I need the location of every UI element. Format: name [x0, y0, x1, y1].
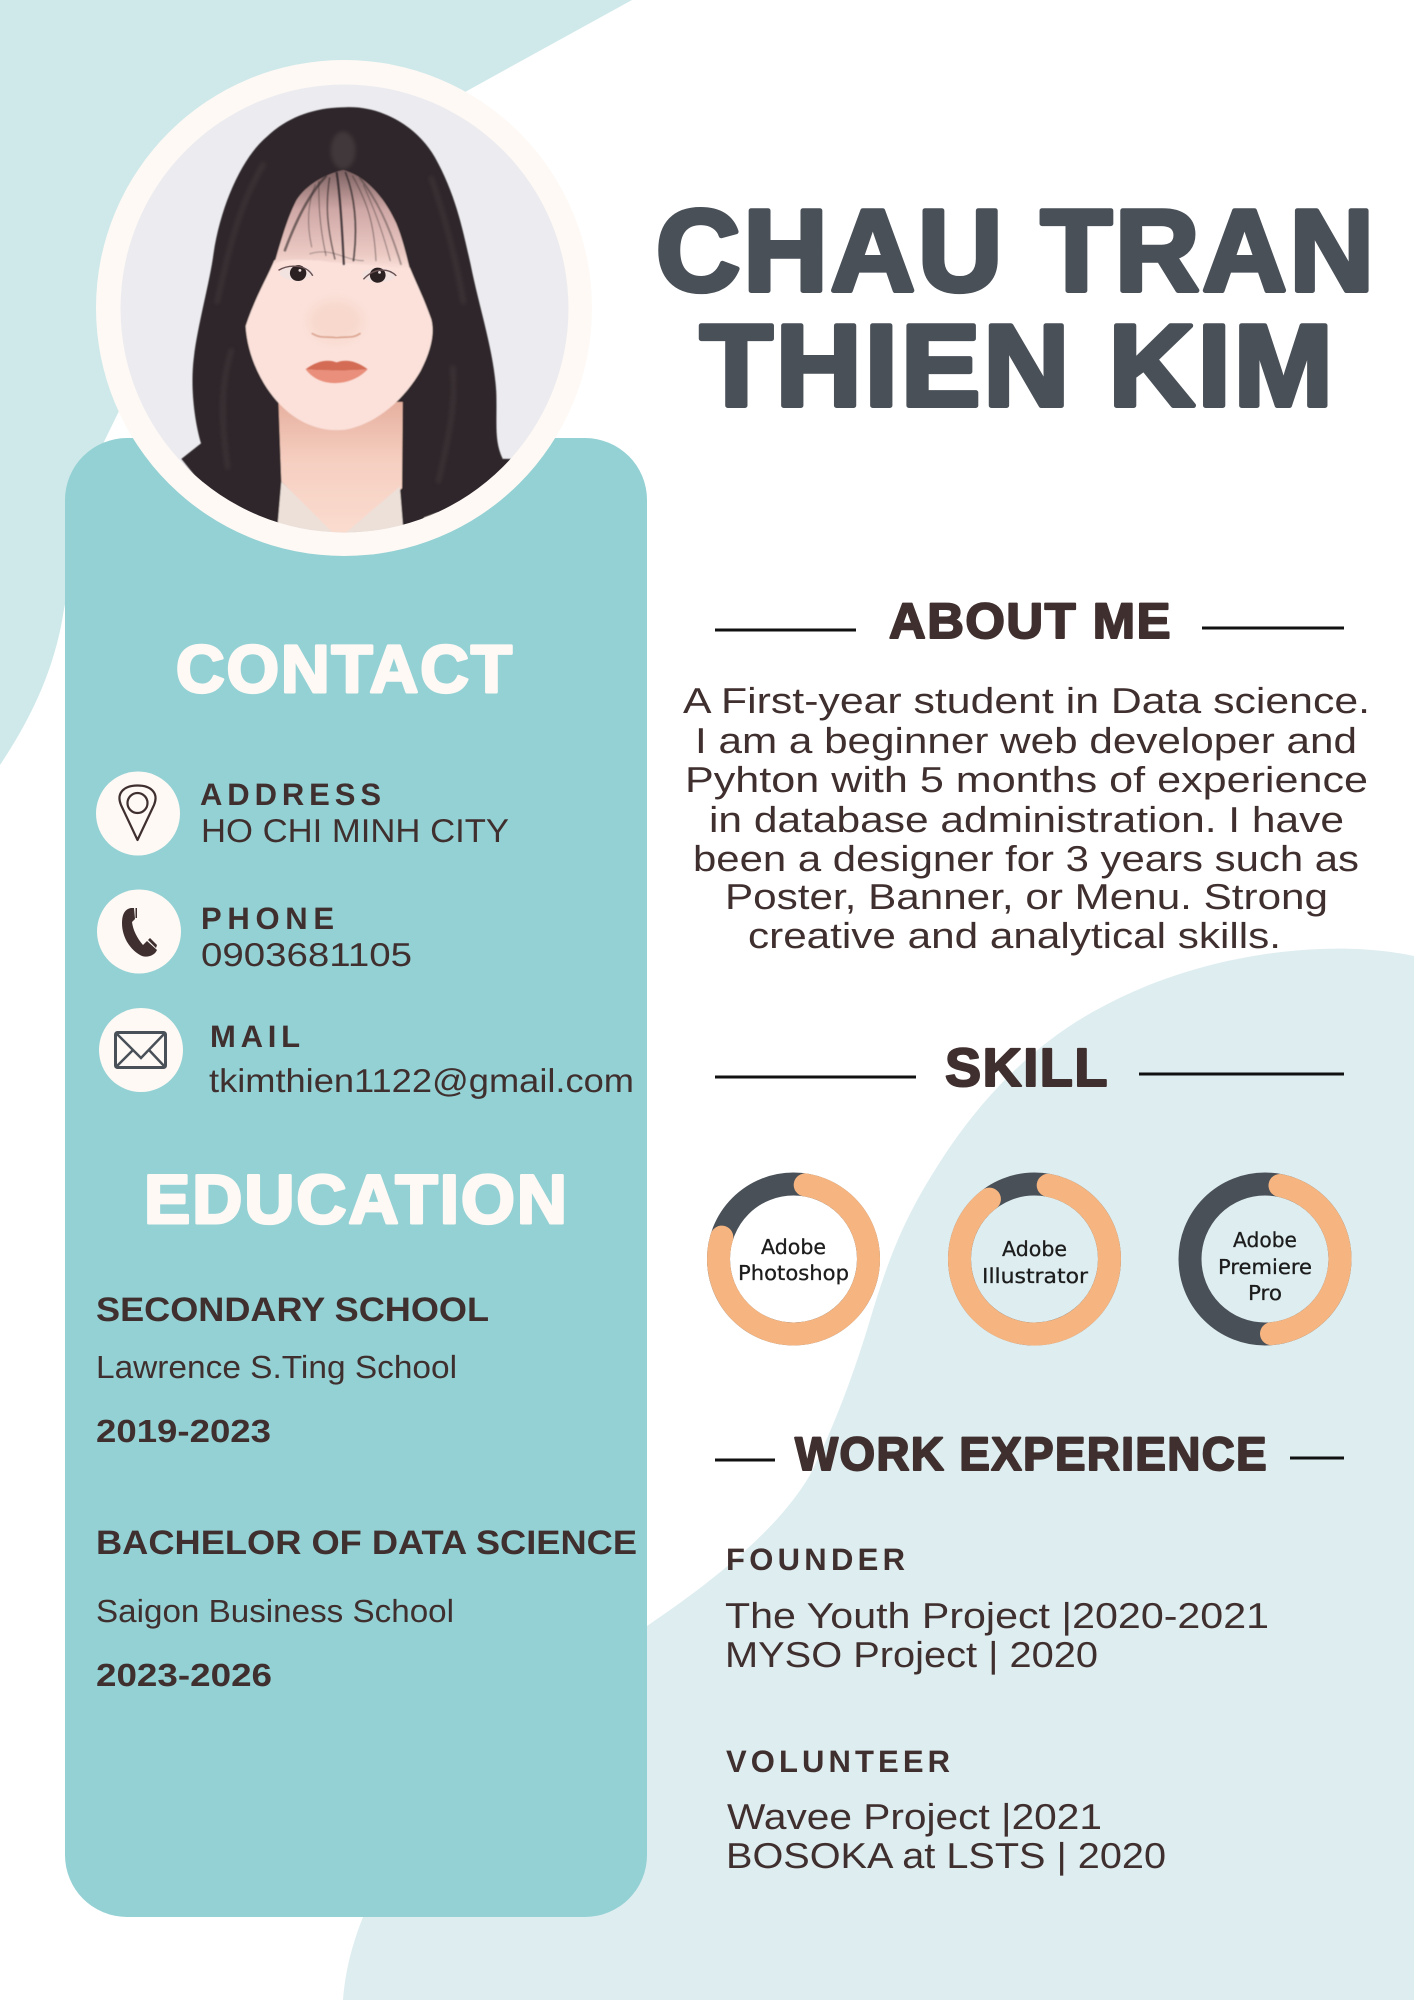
- skill ring: photoshop: [718, 1184, 869, 1334]
- icon: envelope: [99, 1008, 183, 1092]
- skill ring: illustrator: Illustrator: [982, 1264, 1089, 1288]
- heading: contact: CONTACT: [176, 632, 514, 707]
- about me text: Pyhton with 5 months of experience: [685, 759, 1368, 800]
- title: THIEN KIM: [700, 300, 1336, 430]
- icon: location pin: [96, 772, 180, 856]
- work: founder: The Youth Project |2020-2021: [725, 1595, 1269, 1636]
- education: bachelor: Saigon Business School: [96, 1593, 454, 1629]
- about me text: I am a beginner web developer and: [695, 720, 1357, 761]
- work: volunteer: BOSOKA at LSTS | 2020: [726, 1835, 1166, 1876]
- phone row: [97, 890, 412, 974]
- background shape: bottom-right: [343, 949, 1414, 2000]
- mail label: MAIL: [210, 1019, 300, 1054]
- heading: work experience: WORK EXPERIENCE: [795, 1427, 1268, 1480]
- about me text: Poster, Banner, or Menu. Strong: [725, 876, 1328, 917]
- heading: about me: ABOUT ME: [889, 593, 1172, 649]
- address row: [96, 772, 509, 856]
- panel: left sidebar: [65, 438, 647, 1917]
- education: secondary school: SECONDARY SCHOOL: [96, 1291, 489, 1329]
- about me text: [683, 680, 1370, 956]
- education: secondary school: Lawrence S.Ting School: [96, 1349, 457, 1385]
- lips: [306, 361, 368, 383]
- skill ring: premiere pro: [1190, 1184, 1340, 1334]
- mail row: [99, 1008, 634, 1099]
- portrait ring: [96, 60, 592, 556]
- skill ring: photoshop: Photoshop: [738, 1261, 849, 1285]
- heading: about me: [715, 593, 1344, 649]
- education: secondary school: [96, 1291, 489, 1449]
- heading: skill: [715, 1038, 1344, 1098]
- work: founder: MYSO Project | 2020: [725, 1634, 1098, 1675]
- heading: education: EDUCATION: [144, 1161, 569, 1238]
- title: CHAU TRAN: [656, 186, 1377, 316]
- about me text: in database administration. I have: [709, 799, 1344, 840]
- address value: HO CHI MINH CITY: [201, 812, 509, 849]
- education: bachelor: [96, 1524, 637, 1693]
- skill ring: premiere pro: Pro: [1248, 1281, 1282, 1305]
- background shape: top-left: [0, 0, 632, 765]
- work: founder: [725, 1542, 1269, 1675]
- address label: ADDRESS: [200, 777, 381, 812]
- education: bachelor: 2023-2026: [96, 1657, 272, 1693]
- work: founder: FOUNDER: [726, 1542, 905, 1577]
- skill ring: illustrator: Adobe: [1002, 1237, 1067, 1261]
- nose: [310, 302, 362, 340]
- about me text: A First-year student in Data science.: [683, 680, 1370, 721]
- heading: skill: SKILL: [945, 1038, 1109, 1098]
- work: volunteer: VOLUNTEER: [726, 1744, 950, 1779]
- skill ring: premiere pro: Premiere: [1218, 1255, 1312, 1279]
- icon: phone: [97, 890, 181, 974]
- eyes: [278, 265, 396, 283]
- phone label: PHONE: [201, 901, 334, 936]
- about me text: been a designer for 3 years such as: [693, 838, 1359, 879]
- work: volunteer: Wavee Project |2021: [727, 1796, 1102, 1837]
- work: volunteer: [726, 1744, 1166, 1876]
- title: [656, 186, 1377, 430]
- mail value: tkimthien1122@gmail.com: [209, 1062, 634, 1099]
- portrait photo: [110, 75, 580, 545]
- hair highlights: [217, 131, 463, 481]
- skill ring: photoshop: Adobe: [761, 1235, 826, 1259]
- about me text: creative and analytical skills.: [748, 915, 1281, 956]
- phone value: 0903681105: [201, 936, 412, 973]
- skill ring: illustrator: [959, 1184, 1110, 1334]
- education: secondary school: 2019-2023: [96, 1413, 271, 1449]
- skill ring: premiere pro: Adobe: [1233, 1228, 1297, 1252]
- education: bachelor: BACHELOR OF DATA SCIENCE: [96, 1524, 637, 1562]
- hair strands: [285, 173, 401, 264]
